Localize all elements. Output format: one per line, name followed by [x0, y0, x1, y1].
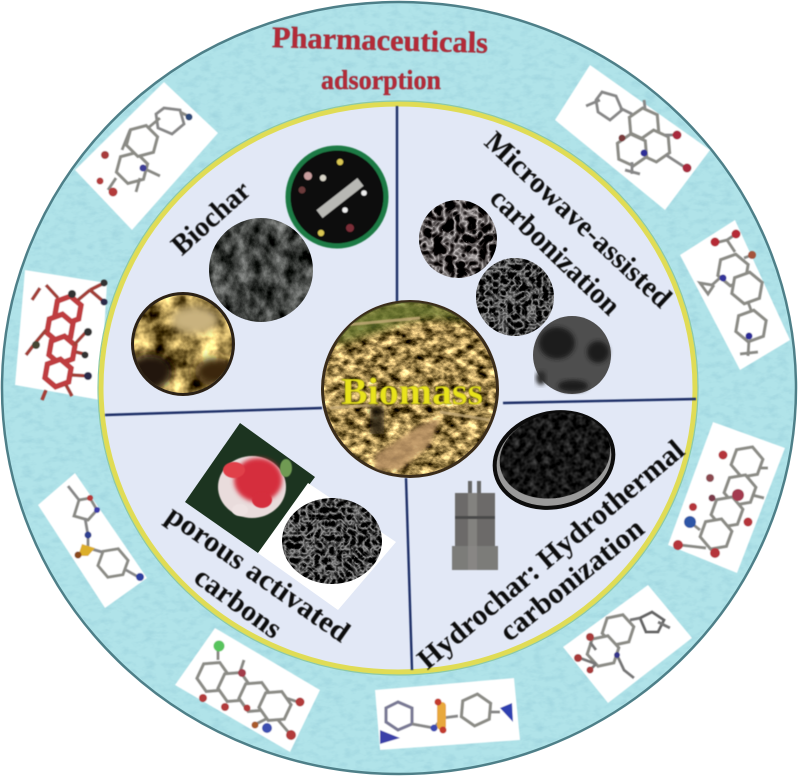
photo: microscope on green ring: [288, 148, 386, 246]
panel: biochar: [128, 148, 386, 396]
card: left red molecule: [15, 270, 108, 400]
photo: dark biochar: [209, 218, 313, 322]
card: bottom-left molecule: [175, 628, 320, 752]
label: Hydrochar: Hydrothermal carbonization: carbonization: [494, 512, 650, 648]
card: top-right molecule: [555, 65, 710, 210]
label: Microwave-assisted carbonization: carbonization: [483, 182, 627, 322]
center: biomass photo: [321, 300, 499, 478]
label: Hydrochar: Hydrothermal carbonization: Hydrochar: Hydrothermal: [411, 434, 691, 676]
title: Pharmaceuticals: [272, 21, 488, 60]
icon: hydrothermal reactor vessel: [452, 481, 498, 570]
quadrant dividers: [105, 106, 696, 670]
photo: pore image 1: [419, 200, 497, 278]
label: porous activated carbons: porous activated: [160, 499, 356, 649]
panel: microwave-assisted carbonization: [419, 125, 678, 394]
card: top-left molecule: [75, 82, 218, 230]
photo: porous carbon on white square: [258, 483, 396, 610]
label: Biochar: Biochar: [166, 175, 257, 262]
inner disc with yellow ring: [98, 101, 698, 675]
card: lower-right molecule: [668, 422, 785, 573]
photo: raw biochar: [128, 292, 235, 396]
card: lower-left molecule: [38, 473, 147, 608]
panel: porous activated carbons: [160, 423, 396, 649]
panel: hydrochar: [411, 400, 691, 676]
title: adsorption: [321, 65, 441, 95]
photo: black hydrochar: [484, 400, 624, 520]
card: bottom molecule: [375, 678, 520, 750]
photo: pore image 2: [476, 258, 554, 336]
title: [272, 21, 488, 95]
photo: pore image 3: [533, 316, 611, 394]
card: bottom-right molecule: [563, 585, 692, 703]
card: right molecule: [680, 220, 790, 370]
label: porous activated carbons: carbons: [188, 561, 288, 645]
photo: red flower: [185, 423, 315, 553]
label: Microwave-assisted carbonization: Microwave-assisted: [478, 125, 678, 315]
label: Biomass: Biomass: [341, 371, 483, 413]
